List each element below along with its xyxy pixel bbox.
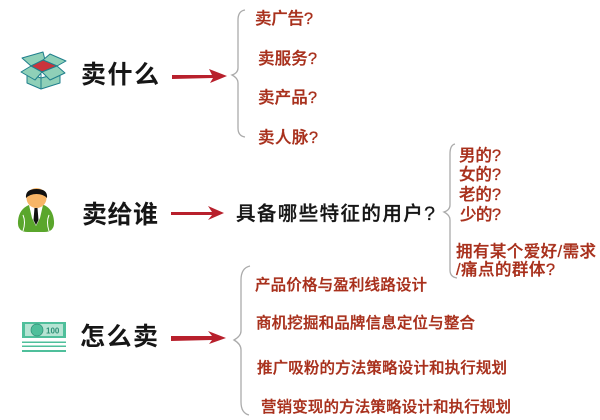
brace: sell options <box>232 10 245 137</box>
list: sell options: 卖服务? <box>258 49 317 68</box>
heading: 怎么卖: 怎么卖 <box>80 323 158 351</box>
list: methods: 推广吸粉的方法策略设计和执行规划 <box>257 358 507 377</box>
list: methods: 商机挖掘和品牌信息定位与整合 <box>256 313 475 332</box>
list: user groups: 少的? <box>460 205 501 224</box>
list: methods <box>255 276 511 416</box>
icon: open box <box>21 52 66 89</box>
text: user traits: 具备哪些特征的用户? <box>236 203 435 225</box>
list: user groups <box>456 146 596 279</box>
list: methods: 产品价格与盈利线路设计 <box>255 276 427 294</box>
list: user groups: 女的? <box>459 165 501 184</box>
list: sell options <box>255 9 318 147</box>
list: user groups: /痛点的群体? <box>456 260 555 279</box>
list: user groups: 拥有某个爱好/需求 <box>456 242 596 261</box>
brace: user groups <box>444 144 457 278</box>
section: how to sell <box>22 266 511 416</box>
icon: banknote stack: 100 <box>46 326 60 336</box>
icon: banknote stack <box>22 322 66 352</box>
section: what to sell <box>21 9 318 147</box>
list: user groups: 老的? <box>459 185 501 204</box>
list: sell options: 卖广告? <box>255 9 313 28</box>
list: sell options: 卖产品? <box>258 88 317 107</box>
arrow: to methods <box>171 331 226 344</box>
heading: 卖什么: 卖什么 <box>81 61 159 89</box>
arrow: to sell options <box>172 69 227 83</box>
list: methods: 营销变现的方法策略设计和执行规划 <box>261 397 511 416</box>
heading: 卖给谁: 卖给谁 <box>82 201 158 229</box>
icon: businessman <box>18 188 54 232</box>
arrow: to user traits <box>171 206 224 220</box>
list: user groups: 男的? <box>459 146 501 165</box>
brace: methods <box>234 266 250 415</box>
list: sell options: 卖人脉? <box>258 128 318 147</box>
section: who to sell to <box>18 144 596 279</box>
